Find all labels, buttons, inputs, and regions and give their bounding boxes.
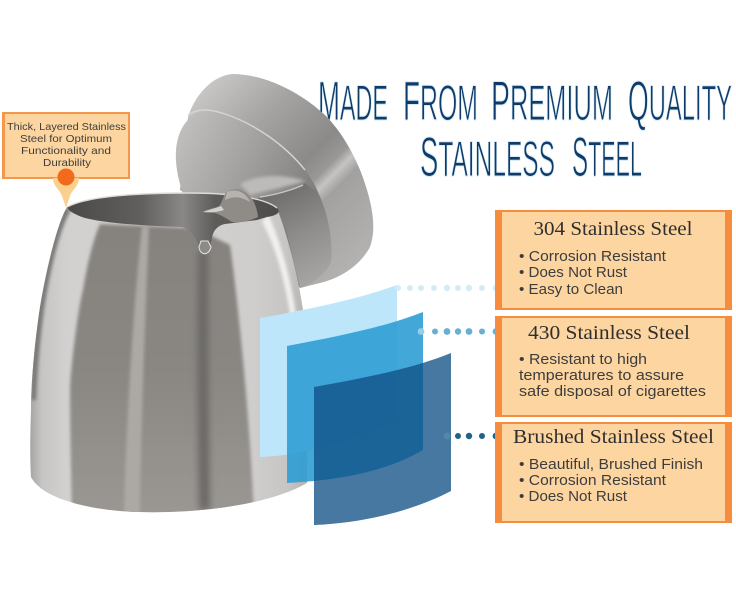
callout pin: [53, 178, 79, 208]
dotted connector: 304: [395, 285, 499, 291]
title: [318, 69, 732, 188]
title: STAINLESS: [420, 125, 555, 188]
layer: 430 stainless steel: [287, 312, 423, 483]
callout text: Durability: [43, 157, 92, 169]
title: MADE: [318, 69, 388, 132]
list: 304 features: [519, 249, 666, 298]
title: STEEL: [572, 125, 642, 188]
layer: 304 stainless steel: [260, 285, 397, 457]
callout text: Thick, Layered Stainless: [7, 121, 126, 133]
list: brushed features: • Does Not Rust: [519, 489, 627, 505]
heading: 430: 430 Stainless Steel: [528, 323, 691, 344]
title: FROM: [403, 69, 478, 132]
text: 430 features: temperatures to assure: [519, 368, 684, 384]
callout text: Steel for Optimum: [20, 133, 112, 145]
heading: 304: 304 Stainless Steel: [534, 219, 693, 240]
panel: 304 stainless steel: [495, 210, 732, 310]
list: brushed features: • Corrosion Resistant: [519, 473, 666, 489]
list: brushed features: • Beautiful, Brushed Finish: [519, 457, 703, 473]
ashtray body: [30, 207, 307, 515]
text: 430 features: [519, 352, 706, 400]
callout marker dot: [58, 168, 74, 186]
list: 304 features: • Corrosion Resistant: [519, 249, 666, 265]
blue material layers: [260, 285, 451, 525]
text: 430 features: • Resistant to high: [519, 352, 647, 368]
heading: brushed: Brushed Stainless Steel: [513, 427, 715, 448]
callout: thick layered steel: [2, 112, 130, 208]
callout text: Functionality and: [21, 145, 111, 157]
layer: brushed stainless steel: [314, 353, 451, 525]
panel: 430 stainless steel: [495, 316, 732, 417]
ashtray opening: [67, 193, 279, 254]
ashtray lid: [176, 74, 373, 288]
list: 304 features: • Easy to Clean: [519, 282, 623, 298]
title: PREMIUM: [491, 69, 613, 132]
dotted connector: brushed: [444, 433, 499, 439]
ashtray cigarette rest: [202, 189, 258, 222]
callout text: [7, 121, 126, 169]
text: 430 features: safe disposal of cigarettes: [519, 384, 706, 400]
list: brushed features: [519, 457, 703, 505]
dotted connector: 430: [418, 328, 499, 335]
panel: brushed stainless steel: [495, 422, 732, 523]
list: 304 features: • Does Not Rust: [519, 265, 627, 281]
